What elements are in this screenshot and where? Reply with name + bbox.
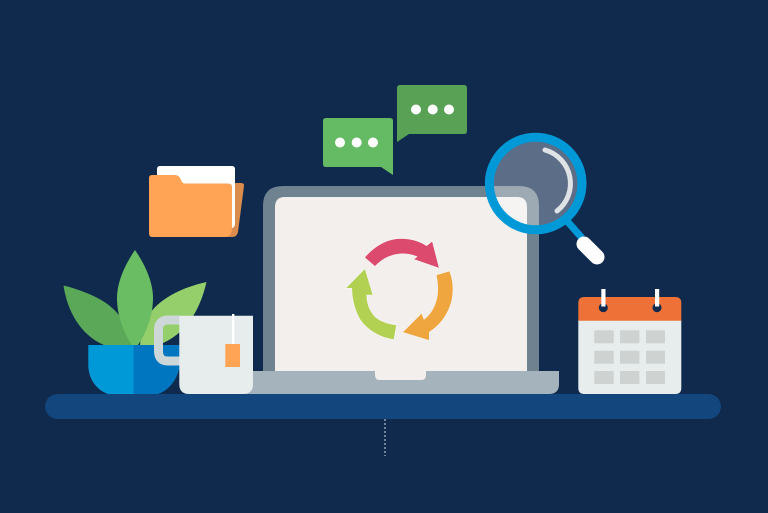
icon: cycle arrows: [346, 238, 453, 340]
laptop bezel: [263, 186, 539, 372]
icon: magnifying glass: [489, 137, 597, 257]
laptop notch: [375, 371, 426, 380]
tea bag string: [232, 314, 234, 345]
right leaf: [140, 282, 206, 345]
orange arrow: [402, 271, 453, 340]
calendar binding holes: [599, 303, 608, 312]
icon: chat bubble left: [323, 118, 393, 175]
calendar header: [578, 297, 681, 321]
icon: tea mug: [158, 314, 253, 394]
dotted line below shelf: [384, 419, 386, 456]
calendar body: [578, 320, 681, 394]
calendar rings: [601, 289, 606, 306]
magnifier grip: [584, 244, 597, 257]
laptop screen: [275, 197, 527, 371]
mug handle: [158, 320, 180, 361]
pot left half: [88, 345, 134, 394]
icon: calendar: [578, 289, 681, 394]
magnifier lens: [489, 137, 582, 230]
icon: chat bubble right: [397, 85, 467, 142]
red arrow: [364, 238, 439, 268]
icon: laptop: [240, 186, 559, 394]
pot right half: [134, 345, 180, 394]
center leaf: [117, 250, 153, 345]
magnifier stem: [567, 221, 582, 238]
lens highlight: [545, 150, 570, 211]
icon: plant: [64, 250, 206, 394]
tea bag tag: [225, 344, 240, 367]
calendar date grid: [594, 330, 665, 384]
icon: folder: [149, 166, 244, 237]
shelf: [45, 394, 721, 419]
mug body: [179, 316, 253, 394]
left leaf: [64, 286, 133, 345]
laptop base: [240, 371, 559, 394]
green arrow: [346, 268, 396, 340]
